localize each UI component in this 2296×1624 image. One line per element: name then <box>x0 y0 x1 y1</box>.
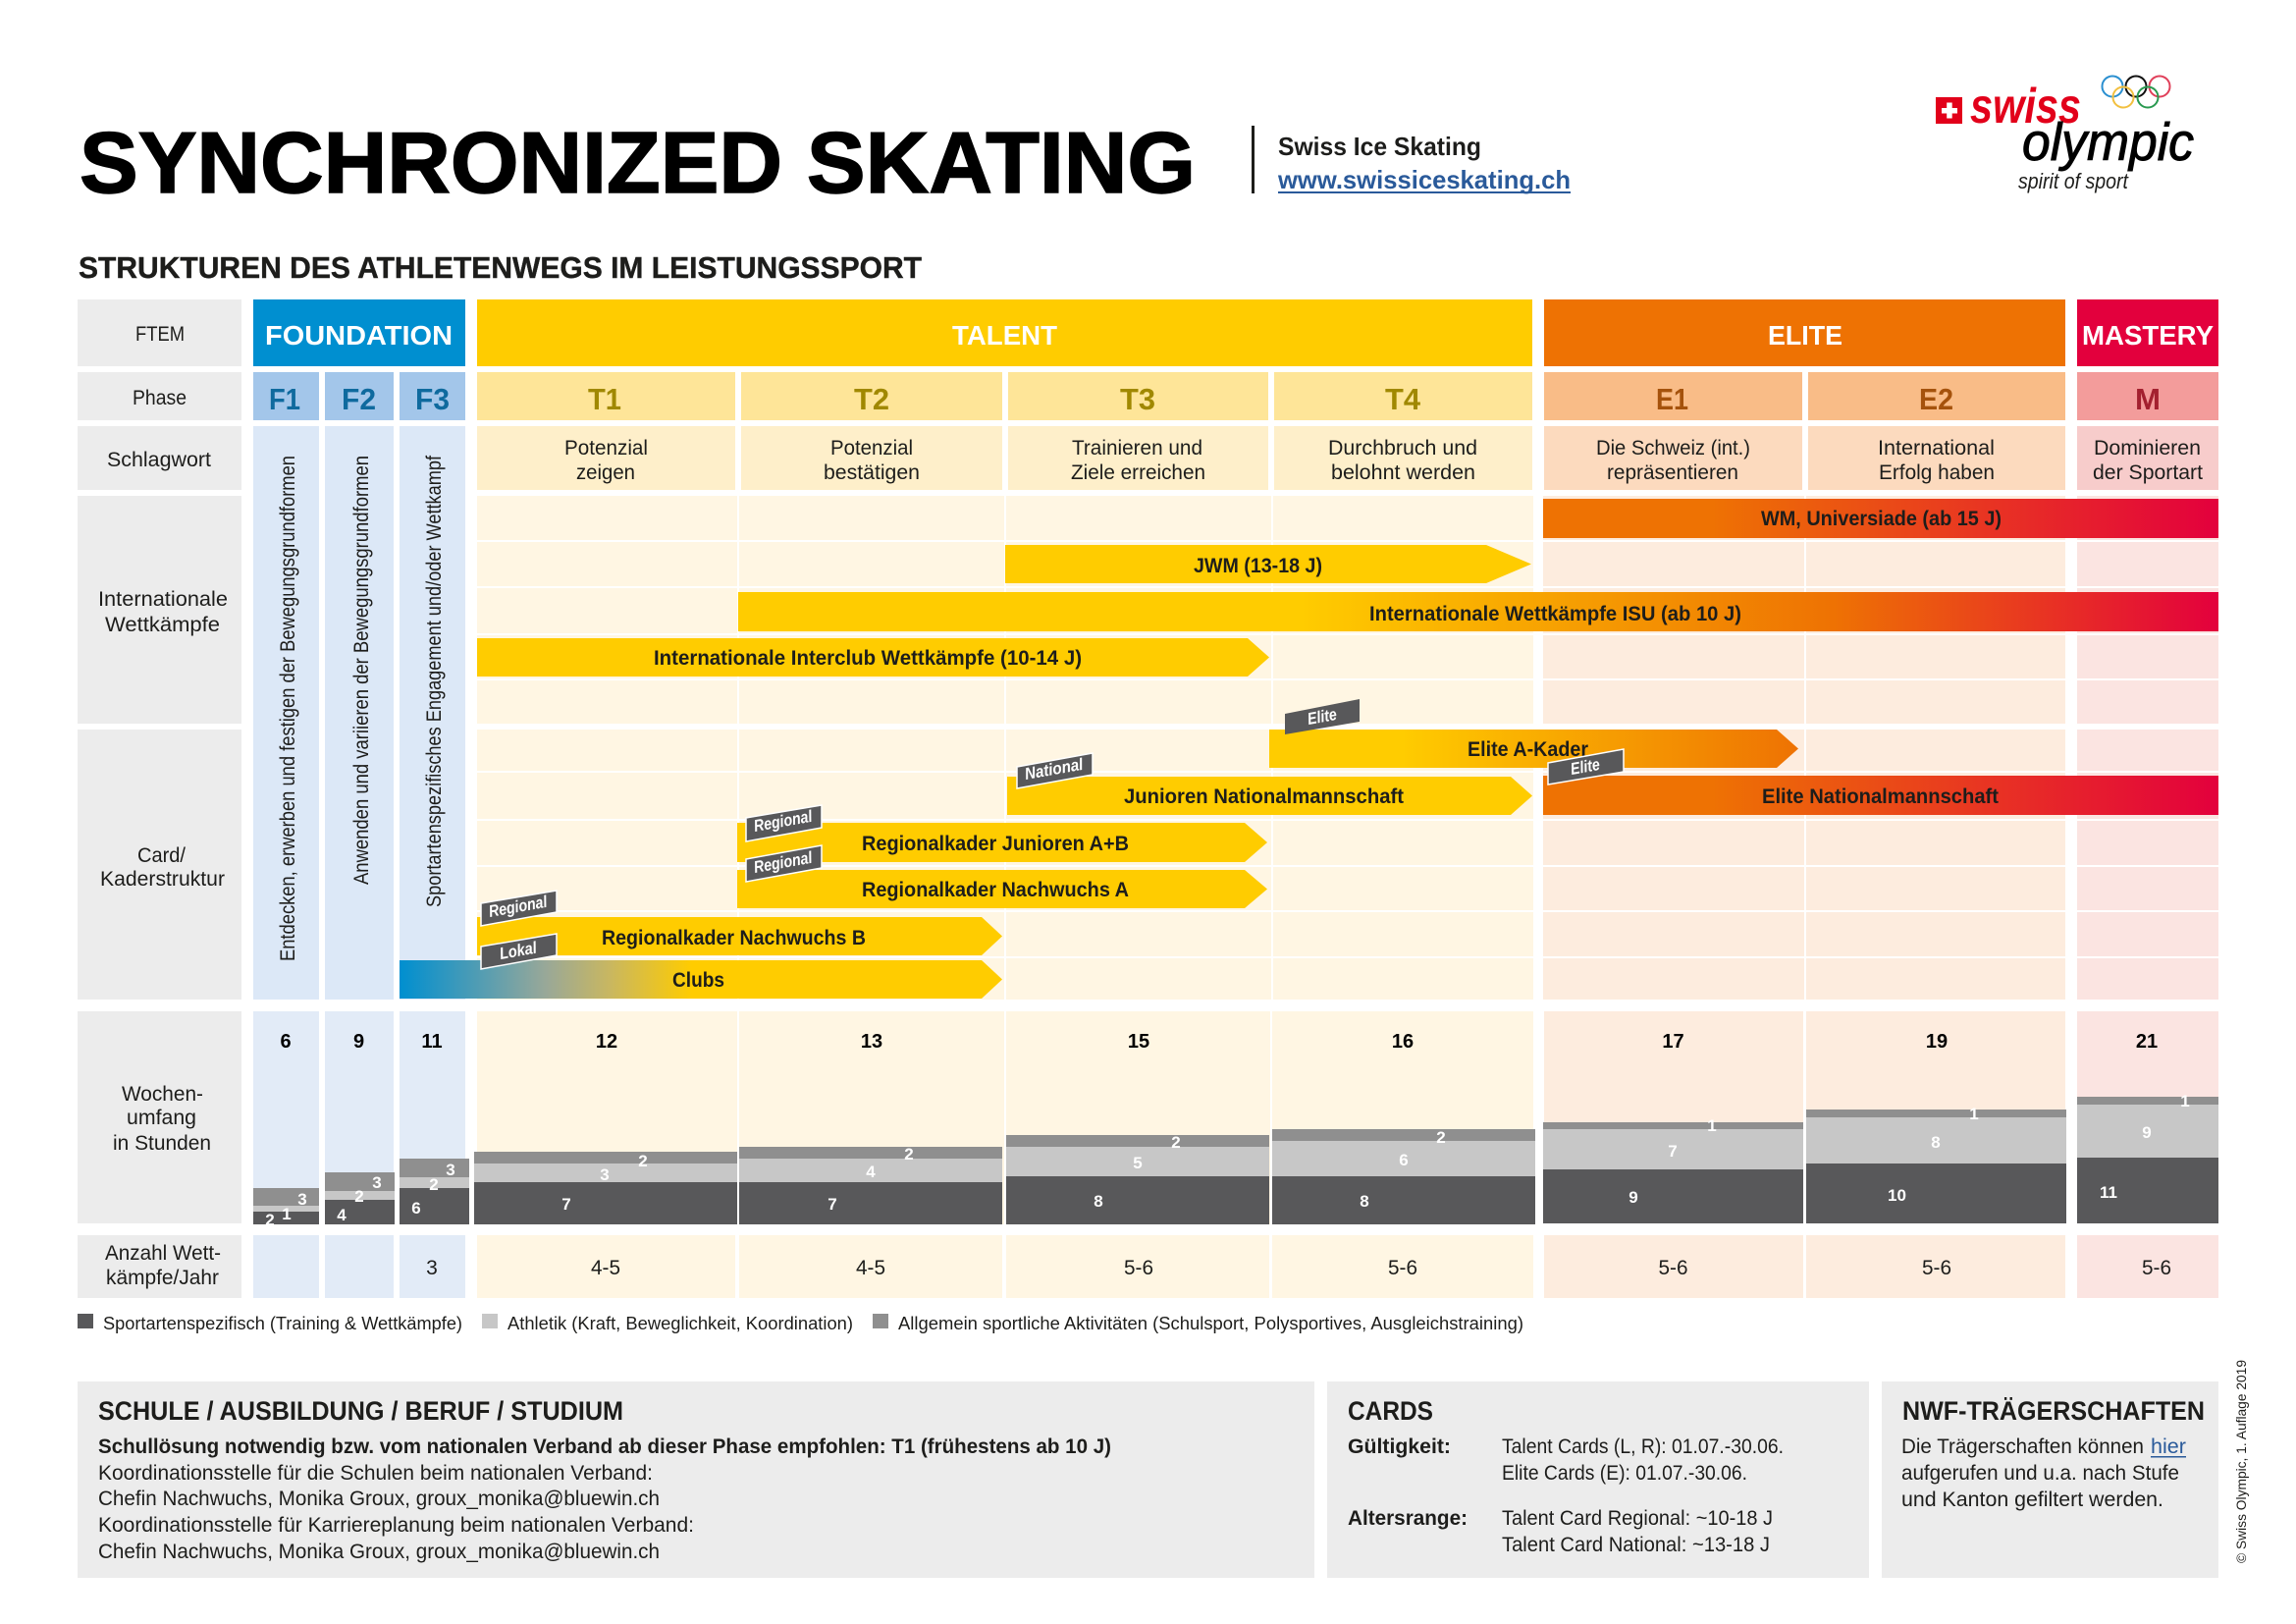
legend: Allgemein sportliche Aktivitäten (Schulsport, Polysportives, Ausgleichstraining) <box>898 1314 1523 1333</box>
panel: keywords: Ziele erreichen <box>1071 461 1205 484</box>
tag: Lokal <box>481 934 557 969</box>
panel: Cards: CARDS <box>1348 1396 1433 1426</box>
stacked bar F2: 4 <box>337 1206 347 1224</box>
stacked bar E2: 19 <box>1926 1031 1948 1053</box>
logo: swiss olympic: olympic <box>2022 113 2194 172</box>
panel: keywords: bestätigen <box>824 461 920 484</box>
stacked bar T2 <box>739 1031 1002 1224</box>
stacked bar T3: 15 <box>1128 1031 1149 1053</box>
panel: row labels: Phase <box>133 387 187 409</box>
stacked bar T3: 8 <box>1094 1192 1103 1211</box>
panel: FTEM headers: TALENT <box>952 320 1057 351</box>
panel: keywords: repräsentieren <box>1607 461 1738 484</box>
panel: number of competitions per year: 5-6 <box>1922 1257 1951 1279</box>
panel: number of competitions per year <box>253 1235 2218 1298</box>
stacked bar T1: 3 <box>600 1165 610 1184</box>
panel: FTEM headers: ELITE <box>1768 320 1842 351</box>
panel: number of competitions per year: 5-6 <box>1124 1257 1153 1279</box>
panel: NWF-Trägerschaften: und Kanton gefiltert werden. <box>1901 1489 2163 1511</box>
bar: Regionalkader Nachwuchs B <box>477 917 1002 955</box>
panel: Schule / Ausbildung / Beruf / Studium <box>78 1381 1314 1578</box>
panel: Cards: Altersrange: <box>1348 1507 1468 1530</box>
stacked bar E2: 10 <box>1888 1186 1906 1205</box>
panel: Cards: Talent Card National: ~13-18 J <box>1502 1534 1770 1556</box>
panel: keywords: International <box>1878 437 1995 460</box>
panel: Cards <box>1327 1381 1869 1578</box>
stacked bar F1 <box>253 1031 319 1229</box>
panel: phases: F3 <box>415 382 450 416</box>
panel: row labels: Schlagwort <box>107 449 211 471</box>
bar: Internationale Interclub Wettkämpfe: Internationale Interclub Wettkämpfe (10-14 J) <box>654 647 1082 670</box>
stacked bar F1: 2 <box>265 1211 275 1229</box>
panel: keywords: Potenzial <box>830 437 913 460</box>
tag: Elite (Nationalmannschaft): Elite <box>1569 755 1601 779</box>
stacked bar T2: 7 <box>828 1195 837 1214</box>
panel: number of competitions per year: 5-6 <box>1659 1257 1688 1279</box>
panel: Schule / Ausbildung / Beruf / Studium: SCHULE / AUSBILDUNG / BERUF / STUDIUM <box>98 1396 623 1426</box>
panel: phases: T3 <box>1120 382 1155 416</box>
organisation block: Swiss Ice Skating <box>1278 132 1481 161</box>
panel: FTEM headers: MASTERY <box>2082 320 2214 351</box>
legend: Sportartenspezifisch (Training & Wettkämpfe) <box>103 1314 462 1333</box>
panel: phases: T4 <box>1385 382 1421 416</box>
panel: phases: T1 <box>588 382 621 416</box>
panel: FTEM headers <box>253 299 2218 366</box>
panel: row labels: Internationale <box>98 588 228 611</box>
stacked bar T4: 2 <box>1436 1128 1446 1147</box>
stacked bar T2: 4 <box>866 1163 876 1181</box>
bar: Internationale Interclub Wettkämpfe <box>477 638 1269 677</box>
panel: keywords: zeigen <box>576 461 635 484</box>
panel: keywords: Durchbruch und <box>1328 437 1477 460</box>
stacked bar F1: 1 <box>282 1205 292 1223</box>
panel: number of competitions per year: 5-6 <box>2142 1257 2171 1279</box>
stacked bar T4 <box>1272 1031 1535 1224</box>
stacked bar F3: 11 <box>421 1031 443 1053</box>
panel: row labels: Wochen- <box>122 1083 203 1106</box>
panel: row labels <box>78 299 241 1298</box>
tag: Elite (Nationalmannschaft) <box>1548 749 1624 785</box>
stacked bar F1: 6 <box>280 1031 292 1053</box>
bar: JWM: JWM (13-18 J) <box>1194 555 1322 577</box>
stacked bar E2: 8 <box>1931 1133 1941 1152</box>
panel: number of competitions per year: 5-6 <box>1388 1257 1417 1279</box>
panel: phases: F2 <box>342 382 376 416</box>
panel: NWF-Trägerschaften <box>1882 1381 2218 1578</box>
bar: Elite A-Kader <box>1269 730 1798 768</box>
panel: Schule / Ausbildung / Beruf / Studium: Koordinationsstelle für Karriereplanung beim nationalen Verband: <box>98 1514 694 1537</box>
panel: row labels: umfang <box>127 1107 196 1129</box>
panel: FTEM headers: FOUNDATION <box>265 320 453 351</box>
panel: NWF-Trägerschaften: hier <box>2151 1435 2186 1458</box>
stacked bar M: 1 <box>2180 1092 2190 1110</box>
stacked bar T2: 2 <box>904 1145 914 1164</box>
panel: foundation columns with rotated keywords: Anwenden und variieren der Bewegungsgrundformen <box>350 456 373 885</box>
panel: Cards: Talent Card Regional: ~10-18 J <box>1502 1507 1773 1530</box>
panel: row labels: in Stunden <box>113 1132 211 1155</box>
stacked bar F3 <box>400 1031 469 1224</box>
panel: row labels: Wettkämpfe <box>105 614 220 636</box>
bar: WM, Universiade <box>1543 499 2218 538</box>
tag: Elite (A-Kader) <box>1285 699 1360 734</box>
tag: Lokal: Lokal <box>498 938 539 963</box>
panel: timeline grid background <box>477 496 2218 1000</box>
stacked bar M: 9 <box>2142 1123 2152 1142</box>
stacked bar F2 <box>325 1031 395 1224</box>
panel: number of competitions per year: 3 <box>426 1257 438 1279</box>
bar: Regionalkader Nachwuchs A <box>737 870 1267 908</box>
bar: Elite Nationalmannschaft: Elite Nationalmannschaft <box>1762 785 1999 808</box>
legend <box>78 1314 1523 1333</box>
panel: keywords: der Sportart <box>2093 461 2203 484</box>
panel: Schule / Ausbildung / Beruf / Studium: Chefin Nachwuchs, Monika Groux, groux_monika@bluewin.ch <box>98 1541 660 1563</box>
panel: Schule / Ausbildung / Beruf / Studium: Schullösung notwendig bzw. vom nationalen Verband ab dieser Phase empfohlen: T1 (frühestens ab 10 J) <box>98 1435 1111 1458</box>
panel: foundation columns with rotated keywords: Sportartenspezifisches Engagement und/oder Wettkampf <box>423 456 446 907</box>
stacked bar T4: 6 <box>1399 1151 1409 1169</box>
chart: weekly volume in hours <box>253 1011 2218 1229</box>
stacked bar E1: 1 <box>1707 1116 1717 1135</box>
bar: Elite A-Kader: Elite A-Kader <box>1468 738 1588 761</box>
bar: Internationale Wettkämpfe ISU: Internationale Wettkämpfe ISU (ab 10 J) <box>1369 603 1741 625</box>
stacked bar E1: 9 <box>1629 1188 1638 1207</box>
organisation block <box>1252 126 1571 194</box>
bar: Regionalkader Nachwuchs A: Regionalkader Nachwuchs A <box>862 879 1129 901</box>
panel: NWF-Trägerschaften: aufgerufen und u.a. nach Stufe <box>1901 1462 2179 1485</box>
stacked bar E2: 1 <box>1969 1105 1979 1123</box>
stacked bar F3: 3 <box>446 1161 455 1179</box>
panel: phases: F1 <box>269 382 300 416</box>
bar: JWM <box>1005 545 1531 583</box>
panel: Schule / Ausbildung / Beruf / Studium: Koordinationsstelle für die Schulen beim nationalen Verband: <box>98 1462 653 1485</box>
panel: row labels: Card/ <box>137 844 186 867</box>
panel: phases: E1 <box>1656 382 1688 416</box>
stacked bar F2: 9 <box>353 1031 364 1053</box>
stacked bar E2 <box>1806 1031 2066 1223</box>
stacked bar T1: 7 <box>561 1195 571 1214</box>
panel: phases: M <box>2135 382 2161 416</box>
bar: Elite Nationalmannschaft <box>1543 776 2218 815</box>
stacked bar F3: 2 <box>429 1175 439 1194</box>
copyright note: © Swiss Olympic, 1. Auflage 2019 <box>2233 1360 2249 1563</box>
panel: Cards: Elite Cards (E): 01.07.-30.06. <box>1502 1462 1747 1485</box>
stacked bar T1 <box>474 1031 737 1224</box>
stacked bar E1 <box>1543 1031 1803 1223</box>
stacked bar T1: 12 <box>596 1031 617 1053</box>
bar: Junioren Nationalmannschaft: Junioren Nationalmannschaft <box>1124 785 1404 808</box>
panel: phases: E2 <box>1919 382 1953 416</box>
panel: number of competitions per year: 4-5 <box>856 1257 885 1279</box>
panel: keywords: Dominieren <box>2094 437 2201 460</box>
bar: Regionalkader Junioren A+B: Regionalkader Junioren A+B <box>862 833 1129 855</box>
panel: keywords: belohnt werden <box>1331 461 1475 484</box>
stacked bar E1: 7 <box>1668 1142 1678 1161</box>
stacked bar E1: 17 <box>1662 1031 1684 1053</box>
panel: card and squad structure <box>400 699 2218 999</box>
panel: foundation columns with rotated keywords <box>253 426 465 1000</box>
panel: row labels: kämpfe/Jahr <box>106 1267 219 1289</box>
panel: keywords: Trainieren und <box>1072 437 1202 460</box>
stacked bar F3: 6 <box>411 1199 421 1218</box>
title: SYNCHRONIZED SKATING <box>80 114 1196 211</box>
stacked bar M: 21 <box>2136 1031 2158 1053</box>
stacked bar F2: 3 <box>372 1173 382 1192</box>
stacked bar T4: 8 <box>1360 1192 1369 1211</box>
bar: Junioren Nationalmannschaft <box>1007 777 1532 815</box>
stacked bar M: 11 <box>2100 1183 2117 1202</box>
panel: foundation columns with rotated keywords: Entdecken, erwerben und festigen der Bewegungsgrundformen <box>277 456 299 961</box>
tag: Regional (Nachwuchs A): Regional <box>752 848 815 877</box>
logo: swiss olympic: spirit of sport <box>2018 169 2129 193</box>
stacked bar T1: 2 <box>638 1152 648 1170</box>
organisation block: www.swissiceskating.ch <box>1277 165 1571 194</box>
panel: phases <box>253 372 2218 420</box>
stacked bar T2: 13 <box>861 1031 882 1053</box>
tag: Regional (Junioren A+B): Regional <box>752 807 815 836</box>
subtitle: STRUKTUREN DES ATHLETENWEGS IM LEISTUNGSSPORT <box>79 250 922 285</box>
bar: Clubs <box>400 960 1002 999</box>
logo: swiss olympic: swiss <box>1970 79 2081 134</box>
panel: keywords: Die Schweiz (int.) <box>1596 437 1750 460</box>
stacked bar F1: 3 <box>297 1190 307 1209</box>
stacked bar T3 <box>1006 1031 1269 1224</box>
panel: international competitions <box>477 499 2218 677</box>
stacked bar T4: 16 <box>1392 1031 1414 1053</box>
panel: row labels: FTEM <box>135 323 185 346</box>
stacked bar F2: 2 <box>354 1187 364 1206</box>
panel: NWF-Trägerschaften: Die Trägerschaften können <box>1901 1435 2144 1458</box>
bar: Regionalkader Nachwuchs B: Regionalkader Nachwuchs B <box>602 927 866 949</box>
tag: Regional (Nachwuchs B): Regional <box>487 893 550 921</box>
bar: WM, Universiade: WM, Universiade (ab 15 J) <box>1761 508 2002 530</box>
tag: National: National <box>1023 755 1086 784</box>
tag: Elite (A-Kader): Elite <box>1306 705 1338 729</box>
panel: row labels: Kaderstruktur <box>100 868 225 891</box>
panel: NWF-Trägerschaften: NWF-TRÄGERSCHAFTEN <box>1902 1396 2205 1426</box>
bar: Internationale Wettkämpfe ISU <box>738 592 2218 631</box>
panel: keywords <box>477 426 2218 490</box>
bar: Regionalkader Junioren A+B <box>737 823 1267 862</box>
panel: Cards: Gültigkeit: <box>1348 1435 1451 1458</box>
stacked bar T3: 5 <box>1133 1154 1143 1172</box>
panel: number of competitions per year: 4-5 <box>591 1257 620 1279</box>
panel: keywords: Erfolg haben <box>1879 461 1995 484</box>
stacked bar M <box>2077 1031 2218 1223</box>
panel: row labels: Anzahl Wett- <box>105 1242 221 1265</box>
panel: Schule / Ausbildung / Beruf / Studium: Chefin Nachwuchs, Monika Groux, groux_monika@bluewin.ch <box>98 1488 660 1510</box>
panel: phases: T2 <box>854 382 889 416</box>
panel: Cards: Talent Cards (L, R): 01.07.-30.06. <box>1502 1435 1784 1458</box>
legend: Athletik (Kraft, Beweglichkeit, Koordination) <box>507 1314 853 1333</box>
stacked bar T3: 2 <box>1171 1133 1181 1152</box>
panel: keywords: Potenzial <box>564 437 648 460</box>
bar: Clubs: Clubs <box>672 969 724 992</box>
logo: swiss olympic <box>1936 77 2194 193</box>
